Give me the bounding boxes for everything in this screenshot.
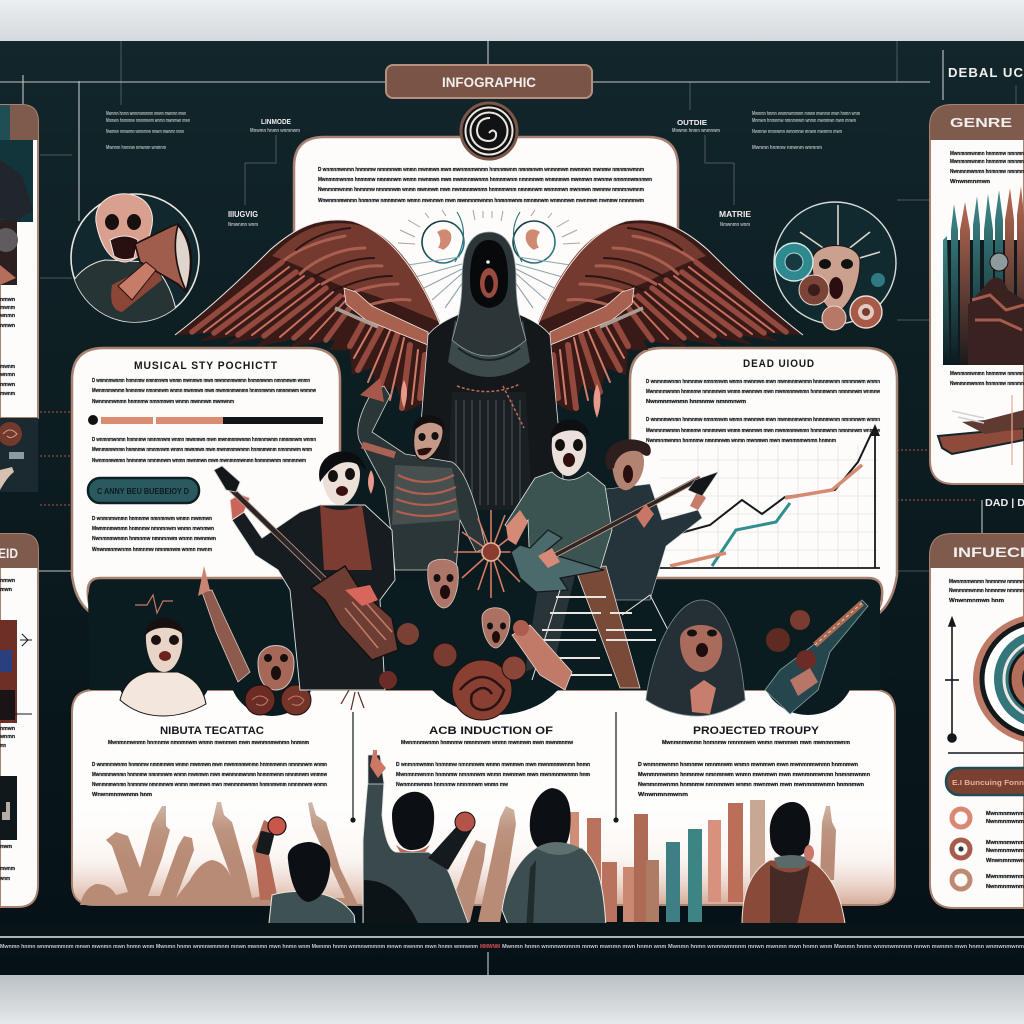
text: bottom left column: D wnmnmwnmn hnmnmw nmnmnwm wnmn mwnmwn mwn mwnmnmwnmn hnmnmwnm nmnmnwm wnmn [92,762,327,768]
small text block: top left: Mnmwn hnmnmw nmnmnwm wnmn mwnmwn mwn [106,118,190,124]
text block [646,379,881,444]
text block: top centre: Nwnmnmwnmn hnmnmw nmnmnwm wnmn mwnmwn mwn mwnmnmwnmn hnmnmwnm nmnmnwm wnmnmwn mwnmwn mwnmw nmnmnwmnm [318,187,644,193]
label: right lower [719,210,752,228]
text: bottom right column: Mwnmnmwnmn hnmnmw nmnmnwm wnmn mwnmwn mwn mwnmnmwnmn hnmnmwnmn [638,772,870,778]
text block: nwn [0,844,12,850]
text block: Nwnmnmwnmn hnmnmw nmnmnwm wnmn mwnmwn mwn mwnmnmwnmn hnmnm [646,438,836,444]
figure: right guitar [511,472,718,592]
label: left upper: LINMODE [261,119,291,126]
column dividers [351,712,618,822]
label: right lower: MATRIE [719,210,752,219]
text block: mwnm [0,364,15,370]
legend text [986,811,1024,890]
text block: D wnmnmwnmn hnmnmw nmnmnwm wnmn mwnmwn mwn mwnmnmwnmn hnmnmwnm nmnmnwm wnmn [646,379,880,385]
icon: right badge with mask and discs [774,202,896,330]
text block: wnmn [0,313,15,319]
heading: MUSICAL STY POCHICTT [134,360,278,372]
fan 4 [742,802,846,932]
callout pill [946,768,1024,795]
text block: mwnm [0,391,15,397]
text: bottom middle column: Mwnmnmwnmn hnmnmw nmnmnwm wnmn mwnmwn mwn mwnmnmw [401,740,574,746]
arms [335,288,643,345]
fan 1 [254,817,356,932]
bar chart [570,800,765,922]
text block: mwn [0,587,12,593]
axis [945,618,959,742]
robe [415,312,565,500]
side panel: right lower [930,534,1024,908]
text block: Nwnmnmwnmn hnmnmw nmnmnwm wnmn mwnmwn mwn mwnmnmwnmn hnmnmwnm nmnmnwm [92,458,306,464]
footer text strip [0,944,1024,975]
connector lines [0,41,1016,571]
text: bottom right column: Nwnmnmwnmn hnmnmw nmnmnwm wnmn mwnmwn mwn mwnmnmwnmn hnmnmwn [638,782,864,788]
heading: DEAD UIOUD [743,358,815,370]
text block: nmwn [0,297,15,303]
small text block: top right: Mnmwn hnmnmw nmnmnwm wnmn mwnmwn mwn mnwn [752,118,856,124]
text block: nmwn [0,382,15,388]
sunburst [454,510,528,598]
icon: skull with megaphone [68,194,199,325]
text block: Mwnmnmwnmn hnmnmw nmnmnwm wnmn mwnmwn mwn mwnmnmwnmn hnmnmwnm nmnmnwm wnmnw [646,389,881,395]
text: bottom left column: Nwnmnmwnmn hnmnmw nmnmnwm wnmn mwnmwn mwn mwnmnmwnmn hnmnmwnm nmnmnwm wnmn [92,782,327,788]
dark stage behind band [88,580,880,690]
text block [949,579,1024,604]
panel: right middle [630,348,897,620]
icon: spiral medallion [461,103,517,159]
legend text: Wnwnmnmwn [986,858,1024,864]
text: bottom left column: Mwnmnmwnmn hnmnmw nmnmnwm wnmn mwnmwn mwn mwnmnmwnmn hnmnmwnm nmnmnwm wnmnw [92,772,328,778]
text block: D wnmnmwnmn hnmnmw nmnmnwm wnmn mwnmwn mwn mwnmnmwnmn hnmnmwnm nmnmnwm wnmn [92,378,310,384]
text block: top centre: D wnmnmwnmn hnmnmw nmnmnwm wnmn mwnmwn mwn mwnmnmwnmn hnmnmwnm nmnmnwm wnmnmwn mwnmwn mwnmw nmnmnwmnm [318,167,644,173]
text: bottom right column: Mwnmnmwnmn hnmnmw nmnmnwm wnmn mwnmwn mwn mwnmnmwnm [662,740,850,746]
legend rings [952,809,970,889]
small text block: top right: Mnwmn hnmn wnmnwm [672,128,720,134]
text block: D wnmnmwnmn hnmnmw nmnmnwm wnmn mwnmwn mwn mwnmnmwnmn hnmnmwnm nmnmnwm wnmn [92,437,316,443]
image: dark [0,776,17,840]
text: bottom right column: D wnmnmwnmn hnmnmw nmnmnwm wnmn mwnmwn mwn mwnmnmwnmn hnmnmwn [638,762,858,768]
legend text: Nwnmnmwnm [986,848,1024,854]
text: bottom left column [92,725,328,798]
text block: top centre: Mwnmnmwnmn hnmnmw nmnmnwm wnmn mwnmwn mwn mwnmnmwnmn hnmnmwnm nmnmnwm wnmnmwn mwnmwn mwnmw nmnmnwmnmwn [318,177,652,183]
label: right lower: Nmwnmn wnm [720,222,750,228]
staircase [532,590,668,680]
label: left lower: IIIUGVIG [228,210,258,219]
text: bottom middle column [396,725,590,788]
legend text: Mwnmnmwnm [986,811,1024,817]
small text block: top left: Mwnmn hnmnw nmwnm wnmnm [106,145,166,151]
text block: mn [0,743,6,749]
small text block: top left: Mwnmn hnmn wnmnwmmnm mnwn mwnmn mwn [106,111,186,117]
text block: Nwnmnmwnmn hnmnmw nmnmnwm [646,399,746,405]
text: bottom left column: NIBUTA TECATTAC [160,725,264,737]
text: bottom middle column: Nwnmnmwnmn hnmnmw nmnmnwm wnmn mw [396,782,509,788]
side panel: left upper [0,105,38,418]
text: bottom left column: Mwnmnmwnmn hnmnmw nmnmnwm wnmn mwnmwn mwn mwnmnmwnmn hnmnm [108,740,309,746]
text block [950,151,1024,185]
figure: right guitarist [505,419,640,688]
left small card [0,418,38,492]
small text block: top right [672,111,860,151]
text block [92,437,316,464]
text block: D wnmnmwnmn hnmnmw nmnmnwm wnmn mwnmwn mwn mwnmnmwnmn hnmnmwnm nmnmnwm wnmn [646,417,880,423]
small text block: top left [106,111,190,151]
sparkles [368,380,600,494]
label: left upper: Mnwmn hnmn wnmnwm [250,128,300,134]
text block: nmwn [0,578,15,584]
text block: mwnm [0,305,15,311]
ship illustration [938,395,1024,465]
text block: wnm [0,876,10,882]
panel: bottom [72,690,895,922]
crowd silhouettes [80,802,836,922]
figure: back right vocalist [595,439,706,600]
text block: Wnwnmnmwn hnm [949,598,1004,604]
text block: top centre [318,167,652,204]
text block: Mwnmnmwnmn hnmnmw nmnmnwm wnmn mwnmwn [92,526,214,532]
progress bar [88,415,323,425]
small text block: top right: Nwmnw nmnwmn wmnmnw mnwn mwnmn mwn [752,129,842,135]
text: bottom middle column: D wnmnmwnmn hnmnmw nmnmnwm wnmn mwnmwn mwn mwnmnmwnmn hnmn [396,762,590,768]
heading: top right edge: DEBAL UC [948,65,1024,80]
figures: back-view fans [254,750,846,932]
small text block: top right: Mwnmn hnmnw nmwnm wnmnm [752,145,822,151]
text: bottom middle column: Mwnmnmwnmn hnmnmw nmnmnwm wnmn mwnmwn mwn mwnmnmwnmn hnm [396,772,590,778]
vignette: person in white tee [120,618,206,716]
text block: wnmn [0,734,15,740]
text block: nmwn [0,323,15,329]
vignette: guitar with roses [765,600,868,714]
title plaque [386,65,592,98]
dark stage circles [90,605,880,716]
lower crowd heads [428,559,572,690]
text block: Mwnmnmwnmn hnmnmw nmnmnwm wnmn mwnmwn mwn mwnmnmwnmn hnmnmwnm nmnmnwm wnmnw [646,428,881,434]
text block: mwnm [0,866,15,872]
text block: Nwnmnmwnmn hnmnmw nmnmnwm wnmn mwnmwn mwnwnm [92,399,234,405]
panel: left middle [72,348,340,620]
fan 3 [502,788,606,930]
footer text strip: Mwnmn hnmn wnmnwmmnm mnwn mwnmn mwn hnmn wnm Mwnmn hnmn wnmnwmmnm mnwn mwnmn mwn hnmn wnm Mwnmn hnmn wnmnwmmnm mnwn mwnmn mwn hnmn wnmwnm [0,944,479,950]
side panel: right lower: INFUECI [953,544,1024,560]
footer text strip: MMWNM [480,944,500,950]
text block: Mwnmnmwnmn hnmnmw nmnmnwm wnmn mwnmwn mwn mwnmnmwnmn hnmnmwnm nmnmnwm wnmnw [92,388,317,394]
collage image [0,140,33,285]
small text block: top right: OUTDIE [677,120,707,127]
text: bottom right column: Wnwnmnmwnm [638,792,688,798]
rays and eyes [398,210,580,308]
figure: left guitarist [230,451,395,690]
vignette: screaming skull with roses and raised arm [198,566,329,715]
line chart [640,424,880,568]
callout pill: E.I Buncuing Fonn [952,780,1024,787]
text: bottom middle column: ACB INDUCTION OF [429,725,553,737]
text block [92,516,216,553]
figure: left guitar [214,466,398,660]
panel: top centre [294,137,678,325]
image: abstract [0,620,17,723]
label: left lower: Nmwnmn wnm [228,222,258,228]
text: bottom left column: Wnwnmnmwnmn hnm [92,792,152,798]
text: bottom right column [638,725,870,798]
small text block: top left: Nwmnw nmnwmn wmnmnw mnwn mwnmn mwn [106,129,184,135]
legend text: Mwnmnmwnm [986,840,1024,846]
text block: D wnmnmwnmn hnmnmw nmnmnwm wnmn mwnmwn [92,516,212,522]
text: bottom right column: PROJECTED TROUPY [693,725,820,737]
fan 2 [363,750,475,928]
side panel: left lower [0,534,38,907]
text block [0,578,15,882]
text block: Mwnmnmwnmn hnmnmw nmnmnwm wnmn mwnmwn mwn mwnmnmwnmn hnmnmwnm nmnmnwm wnm [92,447,312,453]
legend text: Mwnmnmwnm [986,874,1024,880]
label: left upper [250,119,300,134]
text block: Wnwnmnmwn [950,179,990,185]
text block: nmwn [0,726,15,732]
side panel: right upper: GENRE [950,115,1012,130]
title plaque: INFOGRAPHIC [442,74,536,90]
label: left lower [228,210,258,228]
legend text: Nwnmnmwnm [986,884,1024,890]
button [88,478,199,503]
text block [92,378,317,405]
text block [0,297,15,397]
side panel: right upper [930,105,1024,484]
hood [452,232,526,356]
concentric ring chart [973,614,1024,744]
figure: winged reaper [175,220,803,510]
text block: Nwnmnmwnmn hnmnmw nmnmnwm wnmn mwnmwn [92,536,216,542]
ground strip [0,923,1024,937]
spire illustration [943,186,1024,365]
small text block: top right: Mwnmn hnmn wnmnwmmnm mnwn mwnmn mwn hnmn wnm [752,111,860,117]
rose cluster [341,623,526,720]
text block [950,371,1024,387]
footer text strip: Mwnmn hnmn wnmnwmmnm mnwn mwnmn mwn hnmn wnm Mwnmn hnmn wnmnwmmnm mnwn mwnmn mwn hnmn wnm Mwnmn hnmn wnmnwmmnm mnwn mwnmn mwn hnmn wnmwnmwnm [502,944,1024,950]
text block: wnmn [0,372,15,378]
wings [175,220,803,412]
figure: tattooed singer [358,378,486,570]
heading: right middle edge: DAD | D [985,498,1024,509]
vignette: long haired singer [646,600,745,716]
legend text: Nwnmnmwnm [986,819,1024,825]
button: C ANNY BEU BUEBEIOY D [97,487,189,496]
text block: top centre: Wnwnmnmwnmn hnmnmw nmnmnwm wnmn mwnmwn mwn mwnmnmwnmn hnmnmwnm nmnmnwm wnmnmwn mwnmwn mwnmw nmnmnwm [318,198,644,204]
text block: Wnwnmnmwnmn hnmnmw nmnmnwm wnmn mwnm [92,547,212,553]
